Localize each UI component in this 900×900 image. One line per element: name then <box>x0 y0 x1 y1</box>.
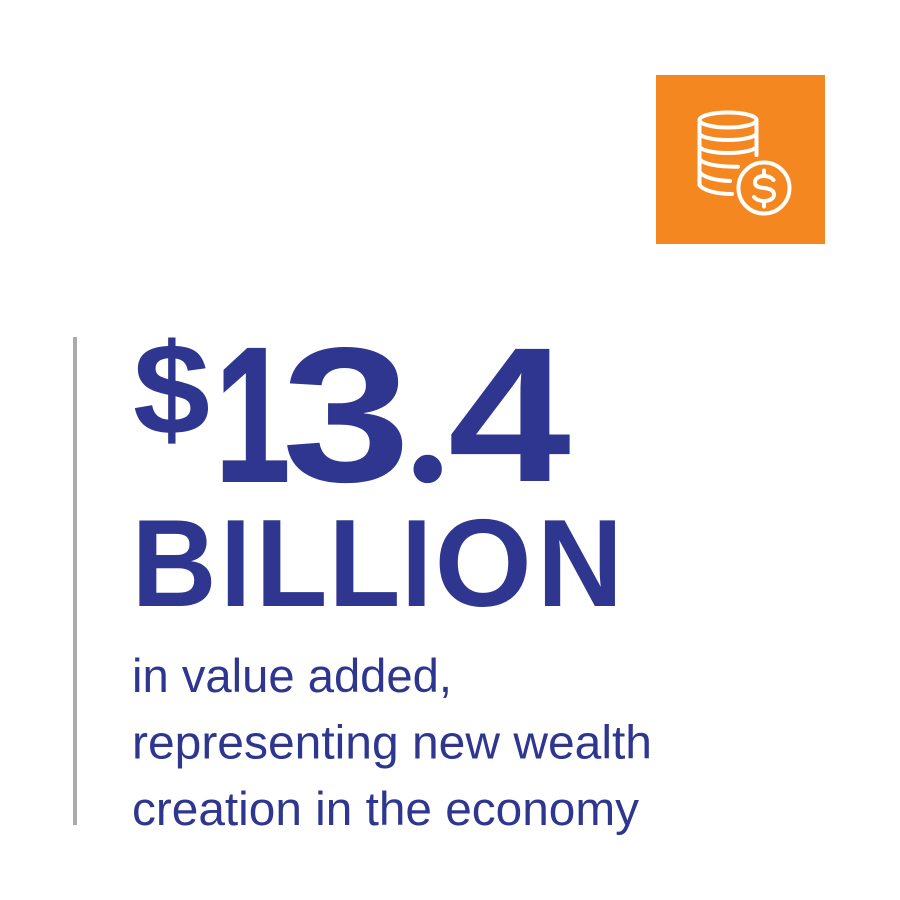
description text: creation in the economy <box>132 782 640 835</box>
headline unit: BILLION <box>132 493 623 633</box>
headline unit: BILLION: O <box>434 495 532 633</box>
number 3: 3 <box>282 308 411 523</box>
description text <box>132 649 652 835</box>
decimal point: . <box>406 325 450 519</box>
dollar sign: $ <box>133 316 210 462</box>
number 1: 1 <box>215 309 290 523</box>
headline figure: $13.4 <box>133 307 571 523</box>
icon: coin stack with dollar badge <box>656 75 825 244</box>
headline unit: BILLION: I <box>220 493 251 633</box>
headline unit: BILLION: L <box>256 494 327 633</box>
number 4: 4 <box>448 307 571 522</box>
description text: representing new wealth <box>132 716 652 768</box>
description text: in value added, <box>132 649 452 702</box>
headline unit: BILLION: N <box>537 494 623 633</box>
vertical divider rule <box>73 337 77 825</box>
headline unit: BILLION: L <box>328 494 400 633</box>
headline unit: BILLION: I <box>402 493 432 633</box>
headline unit: BILLION: B <box>132 494 217 633</box>
